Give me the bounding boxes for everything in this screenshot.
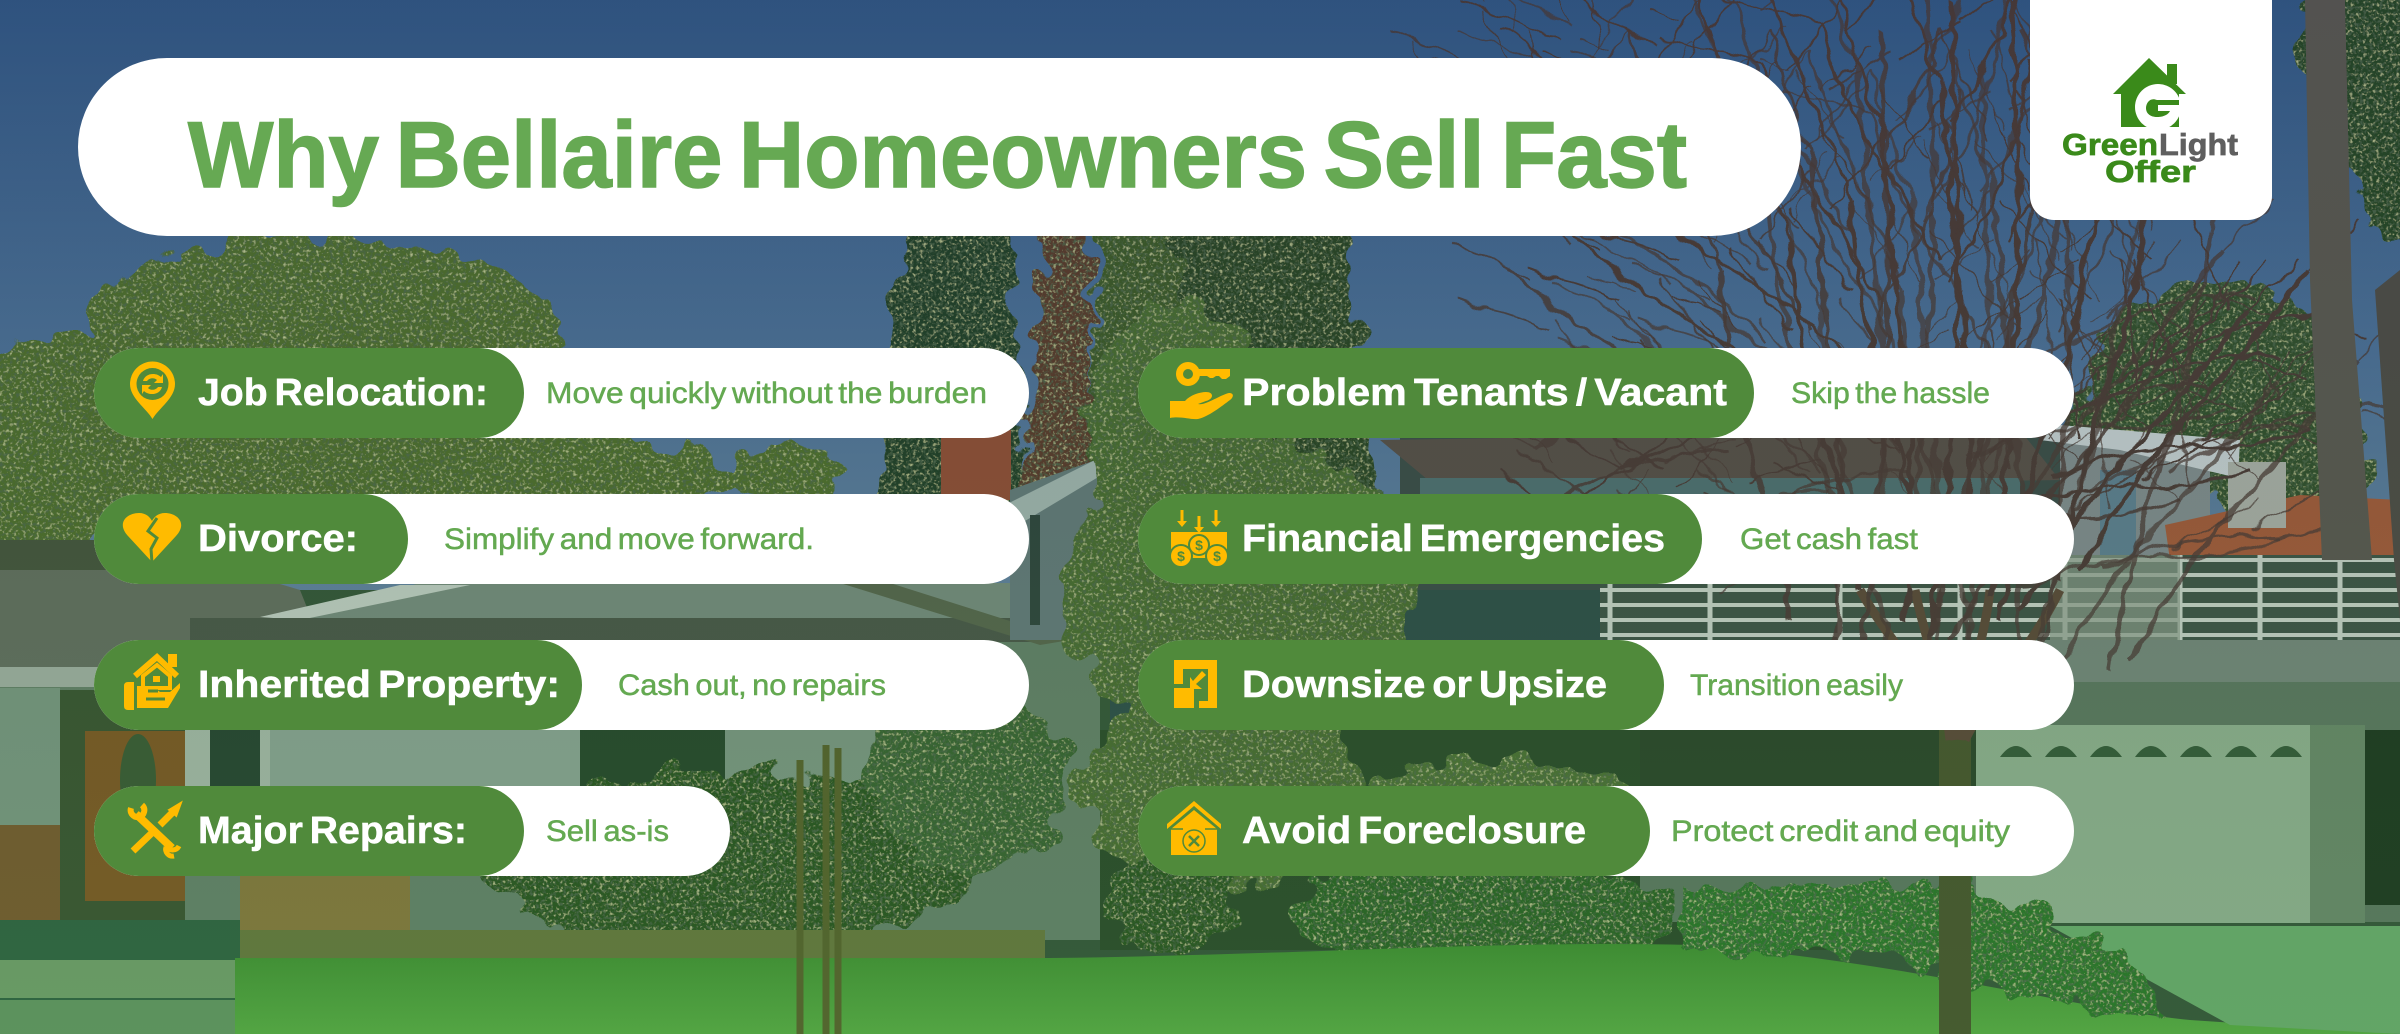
item: Divorce — [94, 494, 1029, 584]
icon: house with cross — [1167, 801, 1221, 855]
description pill — [1138, 348, 2074, 438]
trees: far right foliage — [2060, 280, 2370, 540]
description pill — [1138, 786, 2074, 876]
central olive tree — [1065, 300, 1650, 890]
shrubs along house — [480, 690, 1670, 975]
item: Inherited Property — [94, 640, 1029, 730]
icon: key over hand — [1170, 366, 1233, 419]
garage and lower wall — [1560, 640, 2400, 923]
description: Transition easily — [1690, 669, 1903, 702]
label pill — [1138, 348, 1754, 438]
icon: money and coins: $ — [1177, 548, 1185, 564]
logo background — [2030, 0, 2272, 220]
left tree canopy — [0, 235, 840, 560]
palm trunks and fronds — [2300, 0, 2400, 620]
label pill — [94, 640, 582, 730]
icon: wrench and screwdriver — [131, 804, 180, 856]
label pill — [94, 348, 524, 438]
icon: broken heart — [123, 513, 181, 563]
bare tree trunk and branches — [1390, 0, 2400, 1034]
label pill — [1138, 786, 1650, 876]
item: Financial Emergencies — [1138, 494, 2074, 584]
label pill — [94, 786, 524, 876]
brick chimney — [941, 430, 1011, 500]
label pill — [1138, 640, 1664, 730]
item: Downsize or Upsize — [1138, 640, 2074, 730]
logo wordmark — [2062, 127, 2238, 189]
logo wordmark: Light — [2159, 127, 2238, 162]
description: Sell as-is — [546, 815, 669, 848]
logo wordmark: Offer — [2105, 154, 2196, 189]
label: Major Repairs: — [198, 810, 467, 852]
label pill — [1138, 494, 1702, 584]
label: Divorce: — [198, 518, 358, 560]
item: Avoid Foreclosure — [1138, 786, 2074, 876]
label: Financial Emergencies — [1242, 518, 1665, 560]
description: Get cash fast — [1740, 523, 1919, 556]
ground-level base tone — [0, 590, 2400, 1034]
icon: logo house — [2113, 58, 2186, 130]
description: Move quickly without the burden — [546, 377, 987, 410]
icon: money and coins: $ — [1195, 537, 1203, 553]
label: Job Relocation: — [198, 372, 488, 414]
description pill — [94, 494, 1029, 584]
sky — [0, 0, 2400, 700]
item: Problem Tenants / Vacant — [1138, 348, 2074, 438]
label pill — [94, 494, 408, 584]
icon: money and coins — [1170, 510, 1228, 567]
hedge — [1680, 880, 2170, 1015]
balcony railing — [1600, 555, 2400, 640]
house left: roof and walls — [0, 540, 1100, 940]
brick planter — [235, 875, 1045, 968]
icon: shrinking squares — [1174, 660, 1217, 708]
item: Major Repairs — [94, 786, 730, 876]
item: Job Relocation — [94, 348, 1029, 438]
description pill — [94, 640, 1029, 730]
title text: Why Bellaire Homeowners Sell Fast — [188, 102, 1687, 207]
description: Simplify and move forward. — [444, 523, 814, 556]
icon: money and coins: $ — [1213, 548, 1221, 564]
label: Downsize or Upsize — [1242, 664, 1607, 706]
description: Cash out, no repairs — [618, 669, 886, 702]
description pill — [94, 348, 1029, 438]
label: Inherited Property: — [198, 664, 560, 706]
lawn — [235, 944, 2400, 1034]
description pill — [1138, 640, 2074, 730]
front walk and steps — [0, 920, 248, 1034]
description: Protect credit and equity — [1671, 815, 2010, 848]
cypress trees — [880, 215, 1380, 520]
description pill — [1138, 494, 2074, 584]
young staked trees — [800, 745, 838, 1034]
house centre and upper right — [995, 425, 2400, 950]
title banner — [78, 58, 1801, 236]
driveway — [2050, 926, 2400, 1034]
icon: house in hand — [124, 654, 180, 710]
label: Avoid Foreclosure — [1242, 810, 1586, 852]
logo card — [2030, 0, 2272, 220]
icon: location pin with sync — [130, 362, 175, 419]
title pill — [78, 58, 1801, 236]
description pill — [94, 786, 730, 876]
label: Problem Tenants / Vacant — [1242, 372, 1727, 414]
description: Skip the hassle — [1791, 377, 1990, 410]
logo wordmark: Green — [2062, 127, 2158, 162]
